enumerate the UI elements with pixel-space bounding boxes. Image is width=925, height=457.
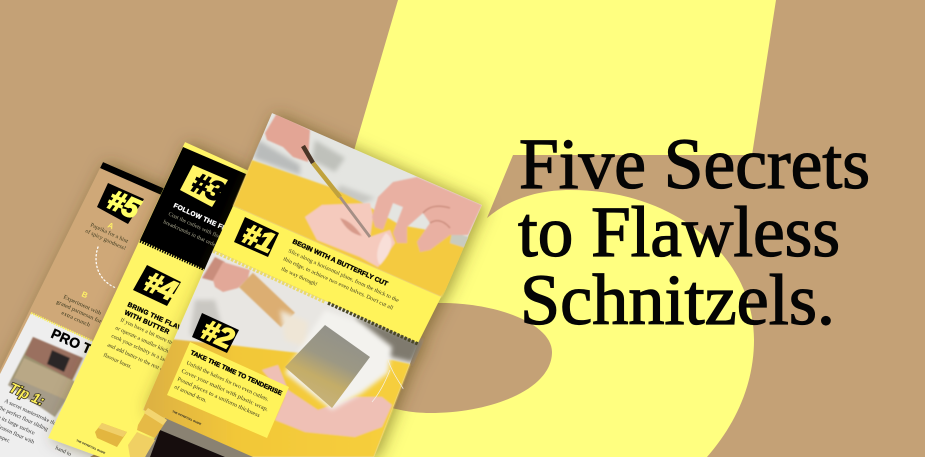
#3 badge: #3 [187,167,229,208]
secret 4 text: If you have a bit more time [119,316,179,349]
title: Schnitzels. [520,260,835,340]
secret 4 text: cook your schnitty in a large pan [110,333,181,370]
secret 4 text: flavour burst. [102,351,133,371]
secret 1 text: thin edge, to achieve two even halves. Don't cut all [282,256,394,312]
tip B: grated parmesan for [55,298,103,325]
secret 3 text [163,202,224,246]
page: secret 5 and pro tips [0,158,167,457]
secret 4 text: or operate a smaller kitchen, [114,325,176,358]
title [518,124,870,340]
tip B: Experiment with [62,294,102,317]
#5 badge: #5 [103,184,145,225]
secret 3 text: FOLLOW THE FLOUR [172,202,241,239]
tip A: A [106,221,115,231]
secret 4 text: BRING THE FLAVOUR [126,301,197,339]
secret 2 text: Pound pieces to a uniform thickness [176,375,262,419]
tip text [0,398,72,457]
title: to Flawless [518,192,840,272]
pro tips heading: PRO TIPS [49,325,115,366]
band for secret 1 [213,206,441,344]
secret 1 text: Slice along a horizontal plane, from the thick to the [287,247,401,304]
photo: mallet [143,250,422,457]
footer: THE SCHNITZEL GUIDE [172,409,202,426]
tip B: extra crunch [60,310,91,329]
secret 4 text: and add butter to the rest of [106,341,166,374]
secret 2 text: TAKE THE TIME TO TENDERISE [189,349,284,398]
page: secrets 1 and 2 [143,113,482,457]
secret 1 text [280,238,401,312]
giant numeral 5 [340,0,776,457]
band for secret 2 [167,313,289,438]
secret 3 text: Coat the cutlets with flour, [167,210,226,242]
tip text: A secret masterstroke that [3,398,60,428]
secret 4 text: WITH BUTTER [123,309,170,336]
black panel for secret 3 [140,147,246,270]
secret 2 text [173,349,284,419]
title: Five Secrets [519,124,870,204]
page: secrets 3 and 4 [48,142,260,457]
icon: butter cubes [95,408,167,457]
tip A: Paprika for a hint [89,221,130,245]
secret 1 text: BEGIN WITH A BUTTERFLY CUT [291,238,389,288]
#4 badge: #4 [140,266,182,307]
secret 4 text [103,302,180,370]
#1 badge: #1 [238,218,279,259]
secret 1 text: the way through! [280,266,318,288]
tip photo [8,337,83,417]
tip B: B [80,290,89,300]
photo: butterfly cut [233,113,482,297]
secret 2 text: of around 4cm. [173,383,208,405]
tip 1 label: Tip 1: [7,379,47,409]
footer: THE SCHNITZEL GUIDE [76,438,106,455]
dotted connector [96,247,116,288]
secret 2 text: Unfold the halves for two even cutlets. [185,359,270,403]
tip A: of spicy goodness! [84,227,127,252]
#2 badge: #2 [197,314,239,355]
secret 3 text: breadcrumbs in that order [162,219,218,249]
secret 2 text: Cover your mallet with plastic wrap. [180,368,270,413]
tip B [56,291,102,327]
breaded schnitzel at foot of page [145,418,253,457]
